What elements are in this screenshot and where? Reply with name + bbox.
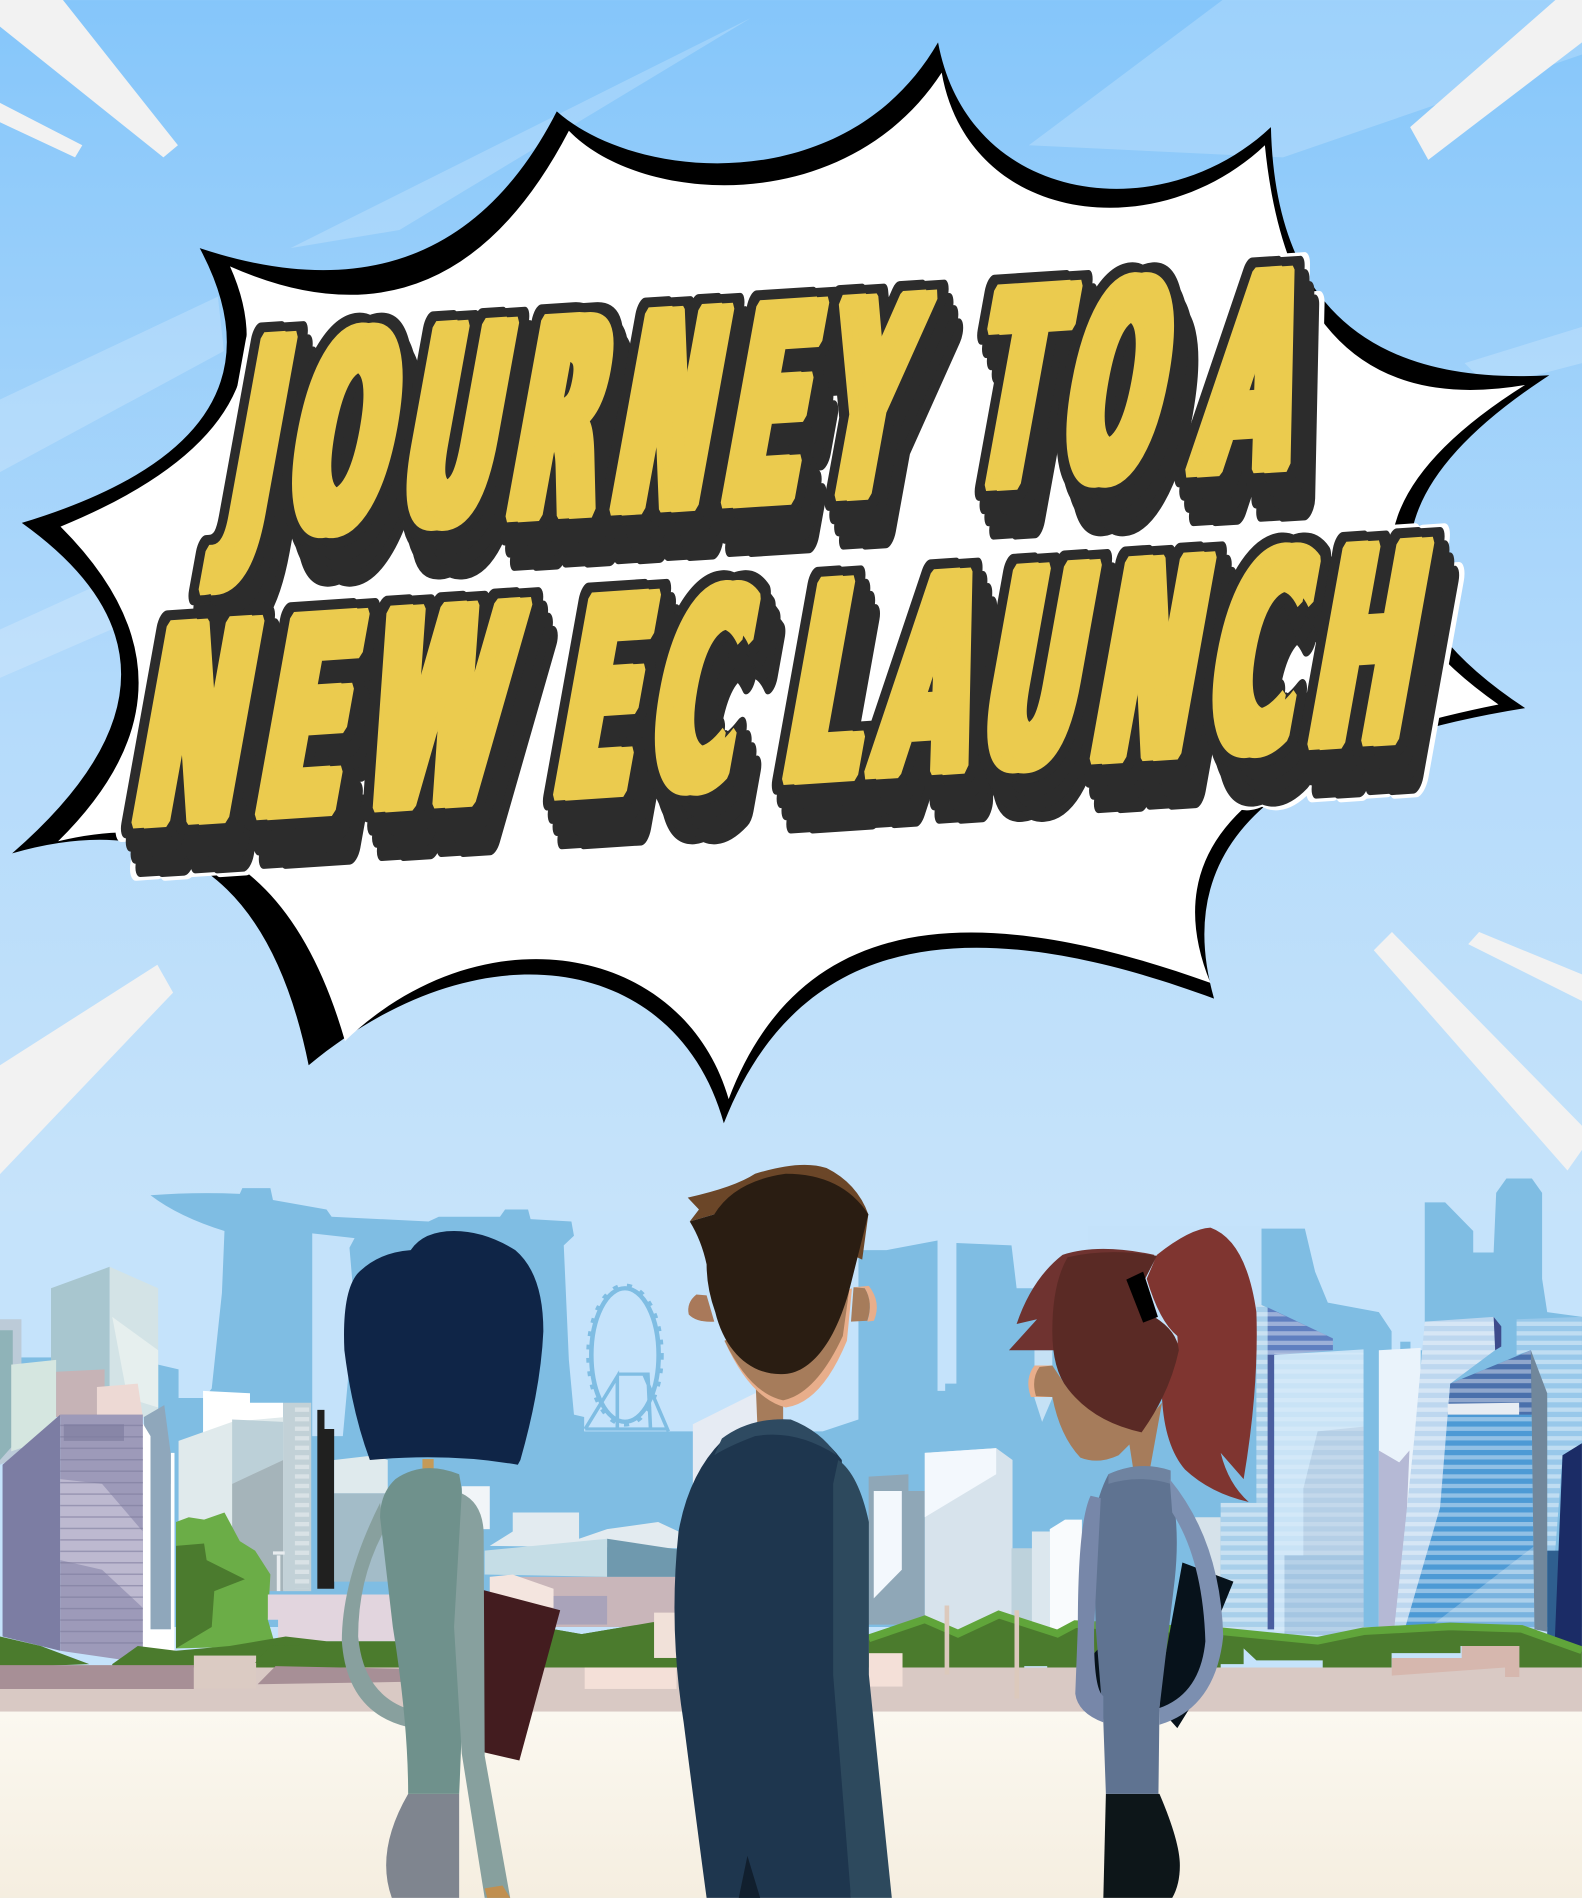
hair: [690, 1174, 868, 1374]
dark 3D extrusion: [106, 216, 1490, 926]
sky behind ponytail: [1088, 1226, 1261, 1350]
ears: [688, 1286, 877, 1322]
white and lilac tower: [1379, 1348, 1421, 1629]
white outline: TO: [969, 225, 1225, 551]
face: [724, 1288, 852, 1408]
white outline: EC: [554, 534, 803, 859]
jacket: [674, 1419, 851, 1898]
yellow letter faces: [111, 216, 1470, 887]
dark 3D extrusion: EC: [555, 547, 804, 873]
dark 3D extrusion: EC: [560, 559, 809, 885]
dark 3D extrusion: TO: [970, 238, 1226, 564]
white outline: A: [1210, 255, 1375, 574]
far left tower: [0, 1319, 21, 1465]
dark 3D extrusion: TO: [948, 238, 1204, 564]
white outline: A: [1181, 255, 1346, 574]
dark 3D extrusion: EC: [538, 559, 788, 885]
body: [380, 1468, 464, 1794]
lamp post: [273, 1553, 285, 1591]
dark 3D extrusion: NEW: [128, 549, 568, 887]
ponytail: [1147, 1228, 1257, 1502]
building behind man: [693, 1393, 775, 1493]
dark 3D extrusion: A: [1192, 216, 1357, 535]
striped glass tower: [1394, 1317, 1582, 1629]
striped tower: [1221, 1303, 1333, 1629]
yellow letter faces: TO: [949, 225, 1205, 551]
comic speed rays: [0, 0, 1582, 1174]
trousers: [1103, 1794, 1180, 1898]
white outline: NEW: [102, 549, 543, 887]
dark 3D extrusion: A: [1206, 255, 1372, 574]
dark 3D extrusion: NEW: [142, 588, 583, 926]
purple office tower: [3, 1415, 143, 1663]
blue silhouette towers: [782, 1179, 1582, 1627]
ferris wheel: [585, 1285, 668, 1431]
trousers: [386, 1794, 459, 1898]
dark 3D extrusion: A: [1175, 229, 1340, 549]
white outline: NEW: [131, 549, 572, 887]
yellow letter faces: A: [1186, 216, 1352, 535]
dark 3D extrusion: TO: [975, 251, 1231, 576]
plaza block: [268, 1595, 398, 1641]
man in navy jacket: [674, 1165, 892, 1898]
dark 3D extrusion: A: [1179, 241, 1345, 561]
singapore skyline: left half: [0, 1188, 796, 1677]
dark 3D extrusion: EC: [565, 572, 814, 898]
dark 3D extrusion: NEW: [111, 562, 551, 900]
dark 3D extrusion: A: [1184, 255, 1350, 574]
yellow letter faces: A: [1175, 216, 1341, 535]
dark 3D extrusion: TO: [965, 225, 1221, 551]
singapore skyline: right half: [782, 1179, 1582, 1680]
collar: [714, 1419, 837, 1455]
dark 3D extrusion: NEW: [137, 574, 578, 912]
glass tower: [51, 1267, 158, 1417]
neck: [422, 1459, 434, 1469]
distant housing: [485, 1512, 679, 1577]
white and grey block: [179, 1391, 311, 1591]
dark 3D extrusion: TO: [980, 264, 1236, 589]
pale glass tower: [1274, 1349, 1364, 1636]
white outline: TO: [983, 264, 1239, 589]
tan blocks: [56, 1369, 143, 1417]
white outline: EC: [568, 572, 818, 898]
white outline: NEW: [117, 588, 557, 926]
white outline: TO: [940, 225, 1196, 551]
yellow letter faces: NEW: [122, 549, 563, 887]
folder: [1092, 1563, 1233, 1728]
left sleeve: [1075, 1496, 1103, 1722]
dark 3D extrusion: EC: [533, 547, 783, 873]
yellow letter faces: NEW: [111, 549, 552, 887]
navy tower: [1547, 1443, 1582, 1648]
dark 3D extrusion: NEW: [133, 562, 573, 900]
body: [1093, 1467, 1177, 1794]
burst white fill: [58, 73, 1525, 1099]
burst black outline: [12, 42, 1549, 1123]
collar: [1108, 1466, 1171, 1484]
dark 3D extrusion: TO: [953, 251, 1209, 576]
neck: [1129, 1403, 1162, 1467]
ear and face: [1028, 1366, 1142, 1461]
dark 3D extrusion: EC: [550, 534, 800, 859]
dark 3D extrusion: TO: [943, 225, 1199, 551]
dark 3D extrusion: TO: [958, 264, 1214, 589]
side tower: [140, 1405, 174, 1651]
yellow letter faces: EC: [545, 534, 794, 859]
hair tie: [1126, 1272, 1158, 1323]
title: [102, 216, 1493, 926]
mid buildings: [869, 1448, 1221, 1629]
neck: [755, 1369, 783, 1431]
jacket slit: [739, 1856, 760, 1898]
hair: [344, 1231, 543, 1465]
glass block behind woman: [334, 1455, 490, 1582]
dark 3D extrusion: NEW: [116, 574, 556, 912]
pale block: [11, 1360, 56, 1451]
hair: [1052, 1252, 1179, 1432]
dark 3D extrusion: NEW: [106, 549, 546, 887]
blue striped skyscraper: [1405, 1350, 1547, 1632]
sleeve: [833, 1460, 892, 1898]
hedge left: [0, 1622, 679, 1677]
woman with dark bob: [342, 1231, 560, 1898]
right arm: [454, 1493, 510, 1898]
blue towers behind: [158, 1365, 199, 1484]
yellow letter faces: TO: [960, 225, 1216, 551]
dark 3D extrusion: EC: [543, 572, 792, 898]
sky notch by ear: [1034, 1350, 1052, 1422]
right arm: [1159, 1479, 1223, 1725]
hair fringe: [688, 1165, 868, 1260]
dark 3D extrusion: A: [1196, 229, 1362, 549]
folder: [482, 1590, 560, 1761]
people group: [342, 1165, 1257, 1898]
ground: [0, 1712, 1582, 1898]
marina bay sands silhouette: [151, 1188, 796, 1627]
white outline: A: [1195, 216, 1361, 535]
light sky bands: [0, 0, 1582, 678]
hedge right: [869, 1613, 1582, 1680]
left arm: [342, 1503, 408, 1727]
sky background: [0, 0, 1582, 1210]
terrace: [490, 1574, 679, 1677]
white outline: [102, 216, 1493, 926]
white outline: EC: [539, 572, 789, 898]
speech burst: [12, 42, 1549, 1123]
white outline: NEW: [146, 588, 586, 926]
promenade strip: [0, 1605, 1582, 1712]
dark 3D extrusion: A: [1170, 216, 1335, 535]
black tower: [317, 1410, 334, 1589]
tree: [176, 1512, 276, 1648]
dark 3D extrusion: A: [1201, 241, 1367, 561]
white outline: EC: [525, 534, 774, 859]
dark 3D extrusion: EC: [528, 534, 778, 859]
woman with ponytail: [1009, 1228, 1257, 1898]
sky gap between towers: [312, 1233, 355, 1436]
white outline: TO: [954, 264, 1210, 589]
white outline: A: [1166, 216, 1332, 535]
dark 3D extrusion: NEW: [120, 588, 561, 926]
yellow letter faces: EC: [534, 534, 783, 859]
hand: [485, 1885, 510, 1898]
fringe: [1009, 1249, 1154, 1350]
